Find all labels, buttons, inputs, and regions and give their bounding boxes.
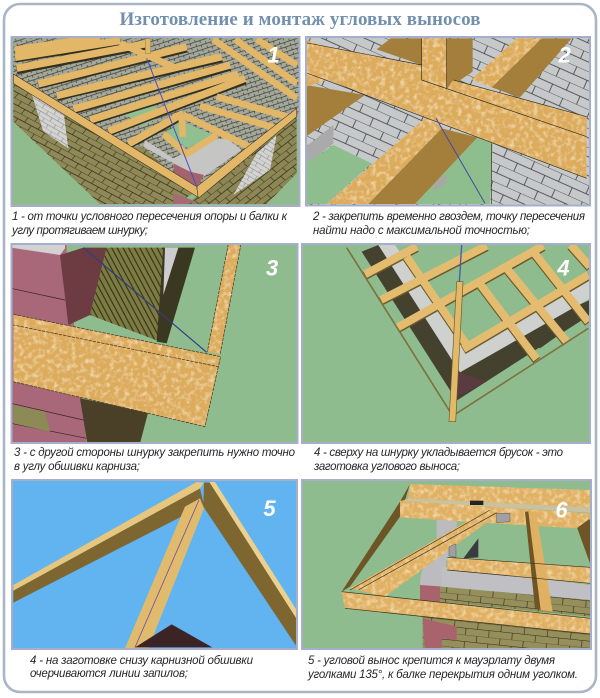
caption 3 [14,447,296,473]
panel 1: cord to corner [11,37,300,206]
caption 6: 5 - угловой вынос крепится к мауэрлату двумя [308,655,555,667]
panel frame 1 [12,37,300,206]
illustration 2 [306,37,590,206]
panel 4: timber over cord [302,244,590,443]
caption 1: 1 - от точки условного пересечения опоры и балки к [12,211,288,223]
panel 5: marking cut lines [12,480,297,649]
panel frame 2 [306,37,590,206]
caption 5 [30,655,254,680]
caption 6: уголками 135°, к балке перекрытия одним уголком. [307,669,578,681]
caption 5: 4 - на заготовке снизу карнизной обшивки [30,655,254,667]
panel number 2: 2 [558,43,571,68]
caption 3: 3 - с другой стороны шнурку закрепить нужно точно [14,447,296,459]
panel frame 6 [302,480,591,649]
caption 2 [312,211,585,237]
caption 1: углу протягиваем шнурку; [11,225,148,237]
illustration 1 [11,37,300,206]
caption 2: 2 - закрепить временно гвоздем, точку пересечения [312,211,585,223]
panel 3: fixing cord at eave corner [11,244,297,443]
panel 6: fixing the corner outrigger [302,480,591,649]
panel number 4: 4 [556,256,570,281]
caption 3: в углу обшивки карниза; [14,461,140,473]
panel number 3: 3 [266,256,278,281]
panel frame 5 [12,480,297,649]
panel frame 4 [302,244,590,443]
panel number 6: 6 [555,497,568,522]
panel frame 3 [12,244,298,443]
panel number 1: 1 [267,43,280,68]
panel 2: nail at crossing [306,37,590,206]
caption 5: очерчиваются линии запилов; [30,668,188,680]
illustration 5 [12,480,297,649]
panel number 5: 5 [263,496,276,521]
caption 6 [307,655,578,681]
caption 4 [313,447,564,473]
caption 2: найти надо с максимальной точностью; [313,225,530,237]
caption 4: заготовка углового выноса; [313,461,460,473]
caption 1 [11,211,288,237]
title: Изготовление и монтаж угловых выносов [120,9,480,30]
illustration 6 [302,480,591,649]
caption 4: 4 - сверху на шнурку укладывается брусок - это [314,447,564,459]
illustration 4 [302,244,590,443]
illustration 3 [11,244,297,443]
